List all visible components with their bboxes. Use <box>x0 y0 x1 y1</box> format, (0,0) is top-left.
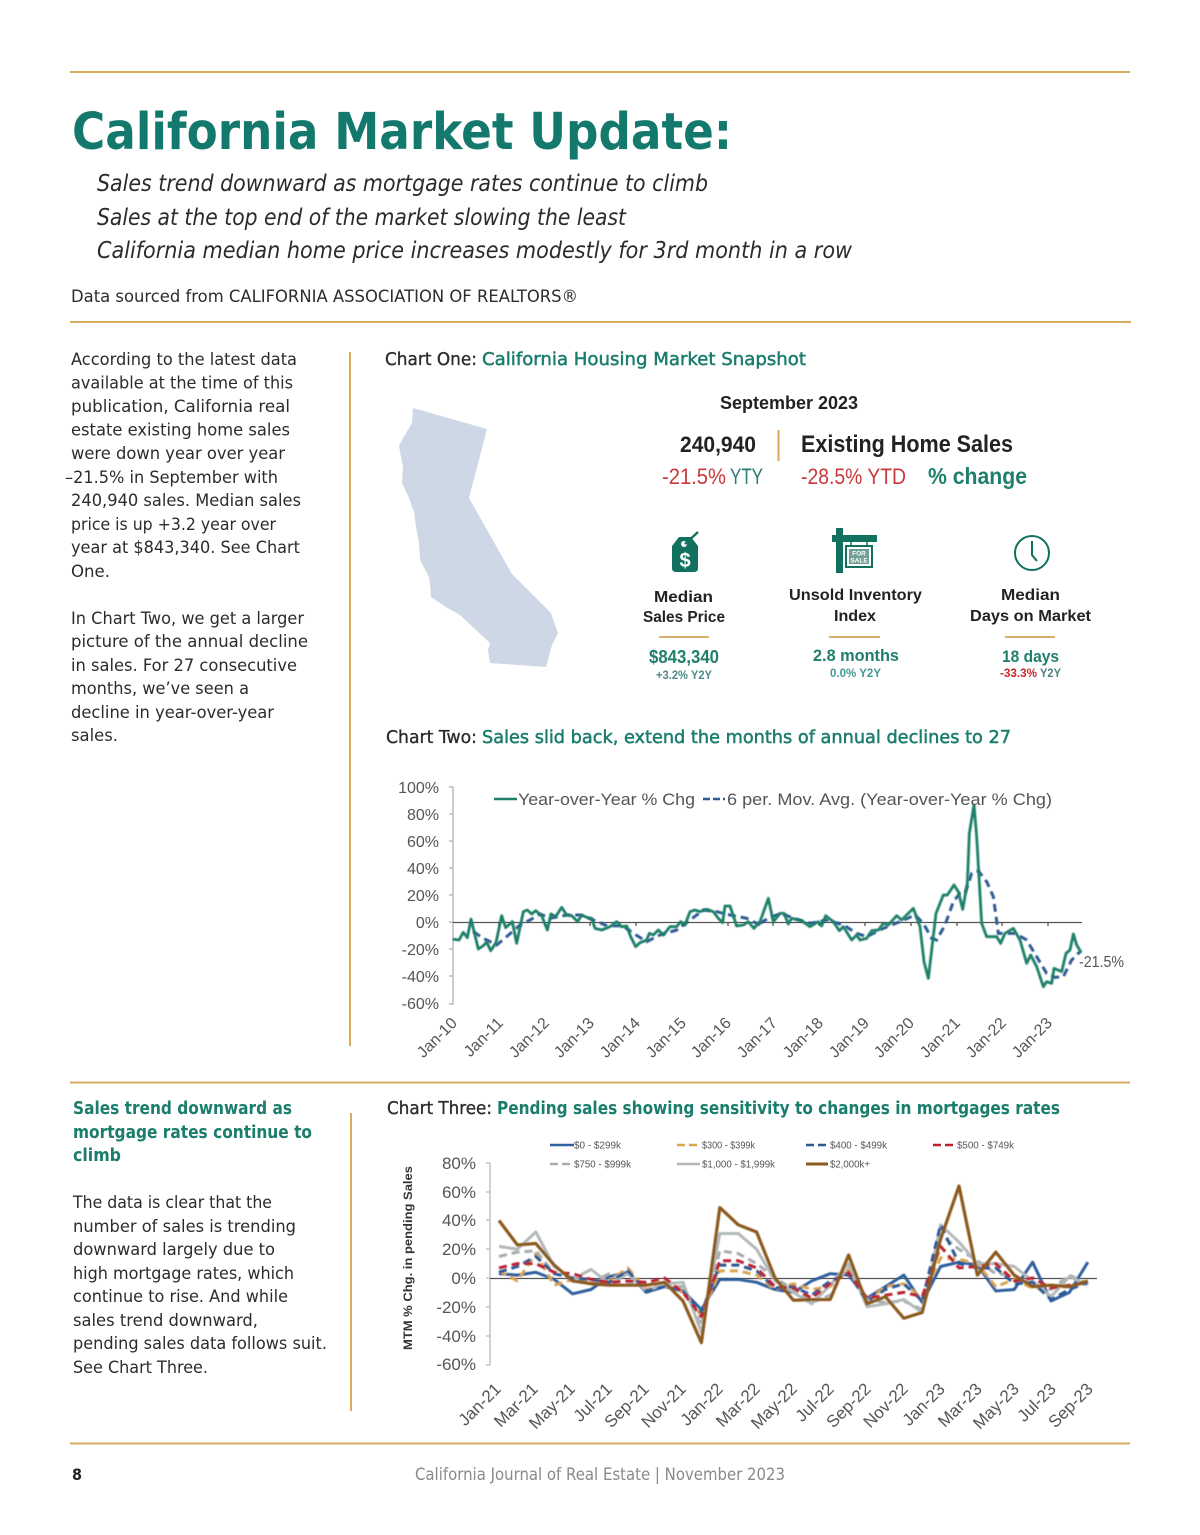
chart two x axis labels: Jan-20 <box>871 1015 918 1061</box>
metric: median days on market: Days on Market <box>970 608 1092 625</box>
chart two y axis labels: 40% <box>407 861 439 878</box>
data label: latest value: -21.5% <box>1079 954 1124 971</box>
chart three x axis labels: Jan-21 <box>455 1379 505 1430</box>
chart three y axis labels: -40% <box>436 1327 476 1346</box>
chart three y axis labels: 40% <box>442 1211 476 1230</box>
chart three y axis labels: 0% <box>451 1269 476 1288</box>
chart two x axis labels: Jan-23 <box>1009 1015 1056 1061</box>
metric: median sales price: Sales Price <box>643 609 725 626</box>
chart three x axis labels: Mar-22 <box>712 1379 764 1431</box>
chart three x axis labels: May-21 <box>525 1379 579 1433</box>
chart three x axis labels: Mar-23 <box>934 1379 986 1431</box>
text block: intro column: in sales. For 27 consecutive <box>71 656 297 676</box>
metric: median days on market <box>970 536 1092 680</box>
chart two x axis labels: Jan-14 <box>597 1015 644 1061</box>
metric: unsold inventory index: 0.0% Y2Y <box>830 668 881 680</box>
metric: median sales price: $843,340 <box>649 647 719 667</box>
chart three x axis labels: Sep-21 <box>601 1379 653 1432</box>
chart three y axis labels: -20% <box>436 1298 476 1317</box>
line chart: year-over-year sales change <box>398 780 1124 1061</box>
callout heading: climb <box>73 1145 121 1166</box>
chart three x axis labels <box>455 1379 1097 1433</box>
chart two y axis labels: -40% <box>402 969 439 986</box>
chart two x axis labels: Jan-11 <box>461 1015 507 1061</box>
chart one: snapshot headline: 240,940 <box>680 432 756 457</box>
text block: intro column: available at the time of this <box>71 374 293 394</box>
chart two x axis labels: Jan-10 <box>414 1015 461 1061</box>
footer page number: 8 <box>72 1465 82 1484</box>
metric: median sales price <box>643 532 725 682</box>
chart three legend <box>550 1140 1015 1170</box>
text block: intro column <box>65 350 308 746</box>
subtitle block: Sales at the top end of the market slowing the least <box>97 205 627 231</box>
price band series <box>499 1186 1088 1343</box>
chart one heading: Chart One: <box>385 349 477 370</box>
callout heading <box>73 1098 312 1166</box>
chart three legend: $500 - $749k <box>957 1140 1015 1152</box>
chart three x axis labels: Jul-22 <box>792 1379 838 1426</box>
chart two y axis labels: 20% <box>407 888 439 905</box>
text block: sales trend callout <box>72 1098 327 1378</box>
chart three legend: $2,000k+ <box>830 1160 870 1170</box>
chart two x axis labels: Jan-13 <box>551 1015 598 1061</box>
chart two x axis labels: Jan-17 <box>734 1015 781 1061</box>
subtitle block <box>97 171 852 264</box>
chart three x axis labels: Jan-23 <box>899 1379 949 1430</box>
chart two legend: Year-over-Year % Chg <box>518 791 695 809</box>
data source note: Data sourced from CALIFORNIA ASSOCIATION OF REALTORS® <box>71 287 578 307</box>
chart two y axis labels: -20% <box>402 942 439 959</box>
chart three x axis labels: Sep-23 <box>1045 1379 1097 1432</box>
chart one heading: California Housing Market Snapshot <box>482 349 806 370</box>
chart one: snapshot headline: -28.5% YTD <box>801 464 906 489</box>
metric: median days on market: 18 days <box>1002 647 1059 666</box>
chart two y axis labels: 80% <box>407 807 439 824</box>
icon: for sale sign <box>832 528 877 573</box>
year-over-year series <box>454 805 1081 987</box>
chart one: snapshot headline: September 2023 <box>720 393 858 413</box>
chart three x axis labels: Sep-22 <box>823 1379 875 1432</box>
line chart: pending sales by price band <box>401 1140 1097 1433</box>
footer publication line: California Journal of Real Estate | November 2023 <box>415 1465 785 1484</box>
chart two x axis labels: Jan-21 <box>917 1015 964 1061</box>
text block: intro column: estate existing home sales <box>71 420 290 440</box>
text block: intro column: year at $843,340. See Chart <box>71 538 300 558</box>
chart three x axis labels: Nov-22 <box>860 1379 912 1432</box>
title: California Market Update: <box>72 103 732 162</box>
metric: unsold inventory index <box>789 528 922 680</box>
text block: sales trend callout: pending sales data follows suit. <box>73 1334 327 1354</box>
text block: intro column: According to the latest data <box>71 350 297 370</box>
chart two x axis labels <box>414 1015 1056 1061</box>
text block: intro column: months, we’ve seen a <box>71 679 249 699</box>
chart three y axis labels: 20% <box>442 1240 476 1259</box>
chart three legend: $400 - $499k <box>830 1140 888 1152</box>
metric: median sales price: +3.2% Y2Y <box>656 670 712 682</box>
chart three legend: $0 - $299k <box>574 1140 622 1152</box>
chart one: snapshot headline <box>662 393 1027 489</box>
chart three legend: $750 - $999k <box>574 1160 632 1170</box>
chart one: snapshot headline: Existing Home Sales <box>801 431 1013 458</box>
chart two heading: Chart Two: <box>386 727 477 748</box>
subtitle block: Sales trend downward as mortgage rates continue to climb <box>97 171 708 197</box>
text block: intro column: In Chart Two, we get a larger <box>71 609 304 629</box>
text block: sales trend callout: number of sales is trending <box>73 1217 296 1237</box>
chart three x axis labels: Mar-21 <box>490 1379 542 1431</box>
text block: sales trend callout: continue to rise. And while <box>73 1287 288 1307</box>
metric: unsold inventory index: Unsold Inventory <box>789 587 922 604</box>
metric: unsold inventory index: 2.8 months <box>813 646 899 665</box>
metric: unsold inventory index: Index <box>834 608 876 625</box>
text block: intro column: 240,940 sales. Median sales <box>71 491 301 511</box>
y axis title: MTM % Chg. in pending Sales <box>401 1166 415 1350</box>
chart one: snapshot headline: YTY <box>730 464 763 489</box>
icon: for sale sign: SALE <box>850 558 868 564</box>
chart two legend: 6 per. Mov. Avg. (Year-over-Year % Chg) <box>727 791 1052 809</box>
metric: median days on market: Median <box>1001 587 1060 604</box>
chart two x axis labels: Jan-18 <box>780 1015 827 1061</box>
chart two y axis labels: 100% <box>398 780 439 797</box>
chart three x axis labels: May-22 <box>747 1379 801 1433</box>
chart two x axis labels: Jan-12 <box>506 1015 553 1061</box>
text block: intro column: picture of the annual decline <box>71 632 308 652</box>
chart three x axis labels: Jan-22 <box>677 1379 727 1430</box>
chart three y axis labels: 60% <box>442 1183 476 1202</box>
chart three heading: Chart Three: <box>387 1098 492 1119</box>
icon: for sale sign: FOR <box>852 550 866 558</box>
chart three y axis labels: 80% <box>442 1154 476 1173</box>
icon: price tag: $ <box>679 550 691 572</box>
subtitle block: California median home price increases modestly for 3rd month in a row <box>97 238 852 264</box>
text block: intro column: decline in year-over-year <box>71 703 274 723</box>
metric: median sales price: Median <box>654 589 713 606</box>
chart two heading: Sales slid back, extend the months of annual declines to 27 <box>482 727 1011 748</box>
chart two y axis labels: -60% <box>402 996 439 1013</box>
icon: price tag <box>672 532 698 572</box>
chart one: snapshot headline: % change <box>928 463 1027 489</box>
chart three x axis labels: May-23 <box>969 1379 1023 1433</box>
text block: intro column: were down year over year <box>71 444 285 464</box>
chart three x axis labels: Nov-21 <box>638 1379 690 1432</box>
text block: sales trend callout: downward largely due to <box>73 1240 275 1260</box>
text block: intro column: sales. <box>71 726 118 746</box>
chart two x axis labels: Jan-16 <box>688 1015 735 1061</box>
text block: sales trend callout: sales trend downward, <box>73 1311 258 1331</box>
chart two x axis labels: Jan-15 <box>643 1015 690 1061</box>
text block: sales trend callout: The data is clear that the <box>72 1193 272 1213</box>
text block: sales trend callout: See Chart Three. <box>73 1358 208 1378</box>
icon: clock <box>1015 536 1049 570</box>
chart three y axis labels <box>436 1154 476 1374</box>
text block: intro column: One. <box>71 562 110 582</box>
chart three y axis labels: -60% <box>436 1355 476 1374</box>
chart three x axis labels: Jul-21 <box>570 1379 616 1426</box>
text block: intro column: –21.5% in September with <box>65 468 278 488</box>
callout heading: Sales trend downward as <box>73 1098 292 1119</box>
chart two legend <box>494 791 1052 809</box>
chart two y axis labels: 60% <box>407 834 439 851</box>
callout heading: mortgage rates continue to <box>73 1122 312 1143</box>
icon: California map <box>399 408 558 667</box>
text block: sales trend callout: high mortgage rates, which <box>73 1264 294 1284</box>
chart three legend: $300 - $399k <box>702 1140 756 1152</box>
chart three heading: Pending sales showing sensitivity to changes in mortgages rates <box>497 1098 1060 1119</box>
chart one: snapshot headline: -21.5% <box>662 464 726 489</box>
chart two x axis labels: Jan-22 <box>963 1015 1010 1061</box>
chart three x axis labels: Jul-23 <box>1014 1379 1060 1426</box>
text block: intro column: publication, California real <box>71 397 290 417</box>
chart two x axis labels: Jan-19 <box>826 1015 873 1061</box>
metric: median days on market: Y2Y <box>1040 668 1061 680</box>
text block: intro column: price is up +3.2 year over <box>71 515 276 535</box>
chart two y axis labels <box>398 780 439 1013</box>
chart two y axis labels: 0% <box>416 915 439 932</box>
chart three legend: $1,000 - $1,999k <box>702 1160 776 1170</box>
metric: median days on market: -33.3% <box>1000 668 1037 680</box>
moving average series <box>473 871 1080 977</box>
